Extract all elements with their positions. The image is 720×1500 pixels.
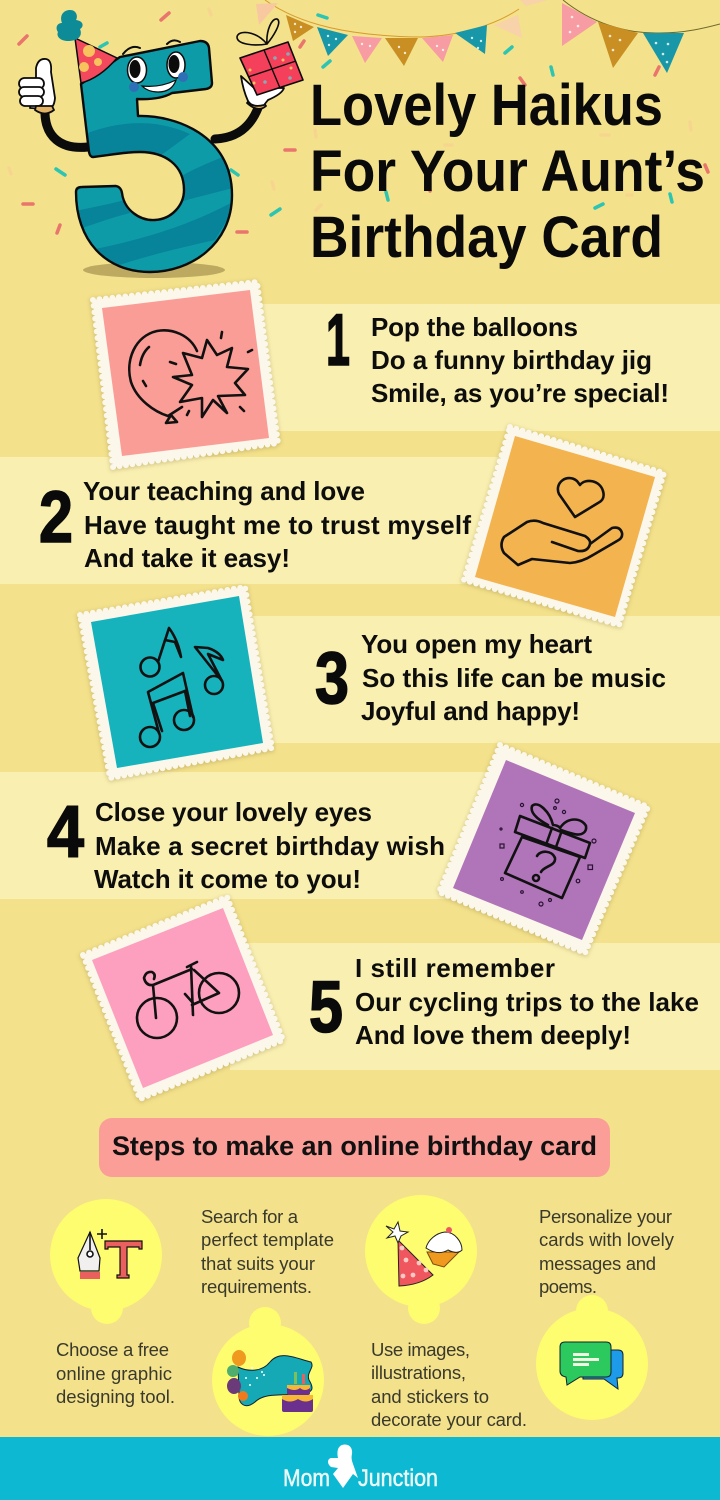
haiku text 4: Watch it come to you! — [94, 864, 361, 894]
text: use images: and stickers to — [371, 1386, 489, 1407]
haiku text 1: Smile, as you’re special! — [371, 378, 669, 408]
text: use images: Use images, — [371, 1339, 470, 1360]
title — [310, 73, 705, 270]
haiku text 5: And love them deeply! — [355, 1020, 631, 1050]
panel: haiku 4 — [47, 745, 648, 953]
number 1: 1 — [326, 300, 350, 381]
panel: haiku 3 — [80, 587, 666, 778]
icon: party hat and cupcake — [386, 1222, 462, 1286]
panel: haiku 2 — [39, 427, 664, 625]
title: Birthday Card — [310, 205, 663, 270]
text: choose a tool — [56, 1339, 175, 1407]
text: choose a tool: online graphic — [56, 1363, 172, 1384]
confetti — [9, 9, 708, 233]
number 2: 2 — [39, 477, 73, 558]
gift box — [237, 19, 303, 95]
icon: music notes — [140, 628, 223, 747]
text: personalize: Personalize your — [539, 1206, 672, 1227]
number 3: 3 — [315, 638, 349, 719]
yellow circle — [50, 1199, 162, 1324]
panel: haiku 5 — [83, 897, 699, 1099]
haiku text 1: Do a funny birthday jig — [371, 345, 652, 375]
body stripes — [79, 123, 230, 265]
step: pick template — [212, 1307, 324, 1436]
text: personalize: poems. — [539, 1276, 597, 1297]
text: choose a tool: Choose a free — [56, 1339, 169, 1360]
mascot shadow — [83, 262, 225, 278]
mascot face — [123, 40, 188, 92]
haiku text 4 — [94, 797, 445, 894]
text: search for a template — [201, 1206, 334, 1297]
party hat — [57, 10, 117, 83]
text: choose a tool: designing tool. — [56, 1386, 175, 1407]
haiku text 1 — [371, 312, 669, 408]
number 4: 4 — [47, 792, 84, 873]
title: Lovely Haikus — [310, 73, 663, 138]
footer bar — [0, 1437, 720, 1500]
steps heading — [99, 1118, 610, 1177]
haiku text 5: Our cycling trips to the lake — [355, 987, 699, 1017]
footer logo: Junction — [358, 1465, 438, 1492]
icon: popping balloon — [129, 330, 252, 423]
step: personalize — [536, 1295, 648, 1420]
haiku text 3: You open my heart — [361, 629, 592, 659]
steps heading: Steps to make an online birthday card — [112, 1131, 597, 1161]
text: use images: decorate your card. — [371, 1409, 527, 1430]
yellow circle — [365, 1195, 477, 1324]
stamp: music notes — [80, 587, 272, 778]
haiku text 2: Your teaching and love — [83, 476, 365, 506]
haiku text 2: And take it easy! — [84, 543, 290, 573]
haiku text 2: Have taught me to trust myself — [84, 510, 471, 540]
text: use images — [371, 1339, 527, 1430]
icon: heart in hand — [502, 478, 622, 565]
footer logo — [283, 1445, 438, 1492]
text: search for a template: that suits your — [201, 1253, 315, 1274]
haiku text 3: So this life can be music — [362, 663, 666, 693]
haiku text 3 — [361, 629, 666, 726]
number 5: 5 — [309, 967, 343, 1048]
text: personalize: messages and — [539, 1253, 656, 1274]
icon: card with balloons and cake — [227, 1350, 313, 1412]
gift sparkles — [500, 799, 596, 906]
text: personalize — [539, 1206, 675, 1297]
character: number five mascot — [19, 10, 303, 278]
text: search for a template: Search for a — [201, 1206, 299, 1227]
step: choose a design tool — [50, 1199, 162, 1324]
haiku text 5: I still remember — [355, 953, 555, 983]
background bands behind the haikus — [0, 304, 720, 1070]
present glove — [241, 76, 284, 109]
mascot arms — [45, 108, 258, 147]
yellow circle — [536, 1295, 648, 1420]
thumbs up glove — [19, 59, 55, 114]
stamp: mystery gift — [439, 745, 648, 953]
stamp: heart in hand — [464, 427, 664, 625]
icon: bicycle — [137, 962, 239, 1038]
haiku text 4: Close your lovely eyes — [95, 797, 372, 827]
haiku text 5 — [355, 953, 699, 1050]
yellow circle — [212, 1307, 324, 1436]
panel: haiku 1 — [93, 282, 669, 467]
text: use images: illustrations, — [371, 1362, 466, 1383]
haiku text 1: Pop the balloons — [371, 312, 578, 342]
step: decorate — [365, 1195, 477, 1324]
text: search for a template: requirements. — [201, 1276, 312, 1297]
icon: chat bubbles — [560, 1342, 623, 1389]
icon: pen and letter T — [78, 1229, 142, 1279]
stamp: balloon — [93, 282, 278, 467]
stamp: bicycle — [83, 897, 283, 1099]
text: search for a template: perfect template — [201, 1229, 334, 1250]
haiku text 4: Make a secret birthday wish — [95, 831, 445, 861]
bunting: right string — [562, 0, 720, 73]
number five body — [76, 41, 232, 272]
bunting: left string — [256, 0, 548, 66]
haiku text 2 — [83, 476, 471, 573]
footer logo: Mom — [283, 1465, 330, 1492]
haiku text 3: Joyful and happy! — [361, 696, 580, 726]
icon: mystery gift — [505, 804, 590, 898]
text: personalize: cards with lovely — [539, 1229, 675, 1250]
